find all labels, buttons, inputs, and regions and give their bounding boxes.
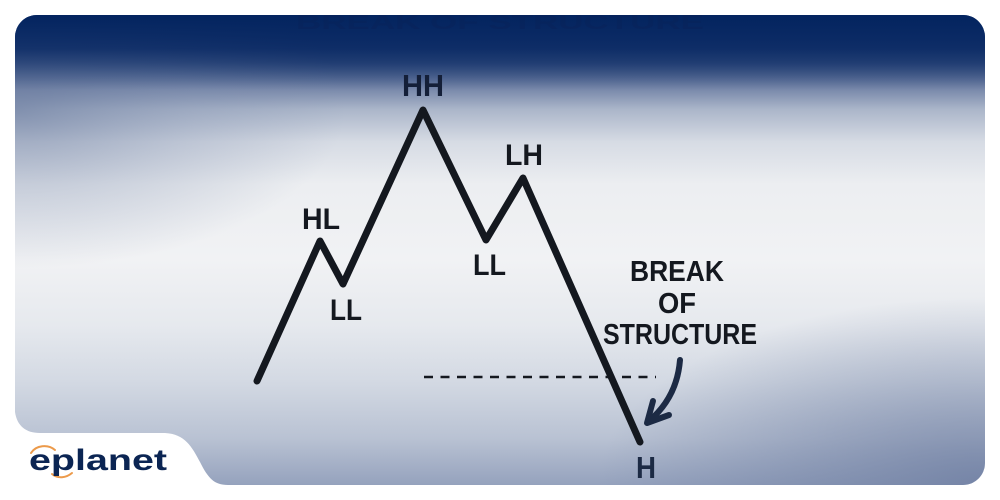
label: HH: HH xyxy=(402,68,444,103)
label: LH: LH xyxy=(505,139,543,172)
callout: break of structure xyxy=(603,256,757,351)
label: HL: HL xyxy=(302,203,340,236)
heading: faint title on dark band: BREAK OF STRUCTURE xyxy=(296,12,704,34)
logo wordmark: eplanet xyxy=(29,444,167,477)
callout: break of structure: STRUCTURE xyxy=(603,319,757,351)
callout: break of structure: OF xyxy=(658,288,696,320)
label: LL left: LL xyxy=(330,294,362,327)
dashed support level xyxy=(424,376,656,378)
logo: eplanet xyxy=(29,444,167,477)
logo arcs xyxy=(31,446,55,453)
logo tab: white corner panel xyxy=(15,412,228,500)
arrow: callout pointer xyxy=(647,360,680,423)
price line chart xyxy=(257,110,640,442)
callout: break of structure: BREAK xyxy=(630,256,724,288)
label: H: H xyxy=(636,450,656,485)
label: LL right: LL xyxy=(473,249,506,282)
